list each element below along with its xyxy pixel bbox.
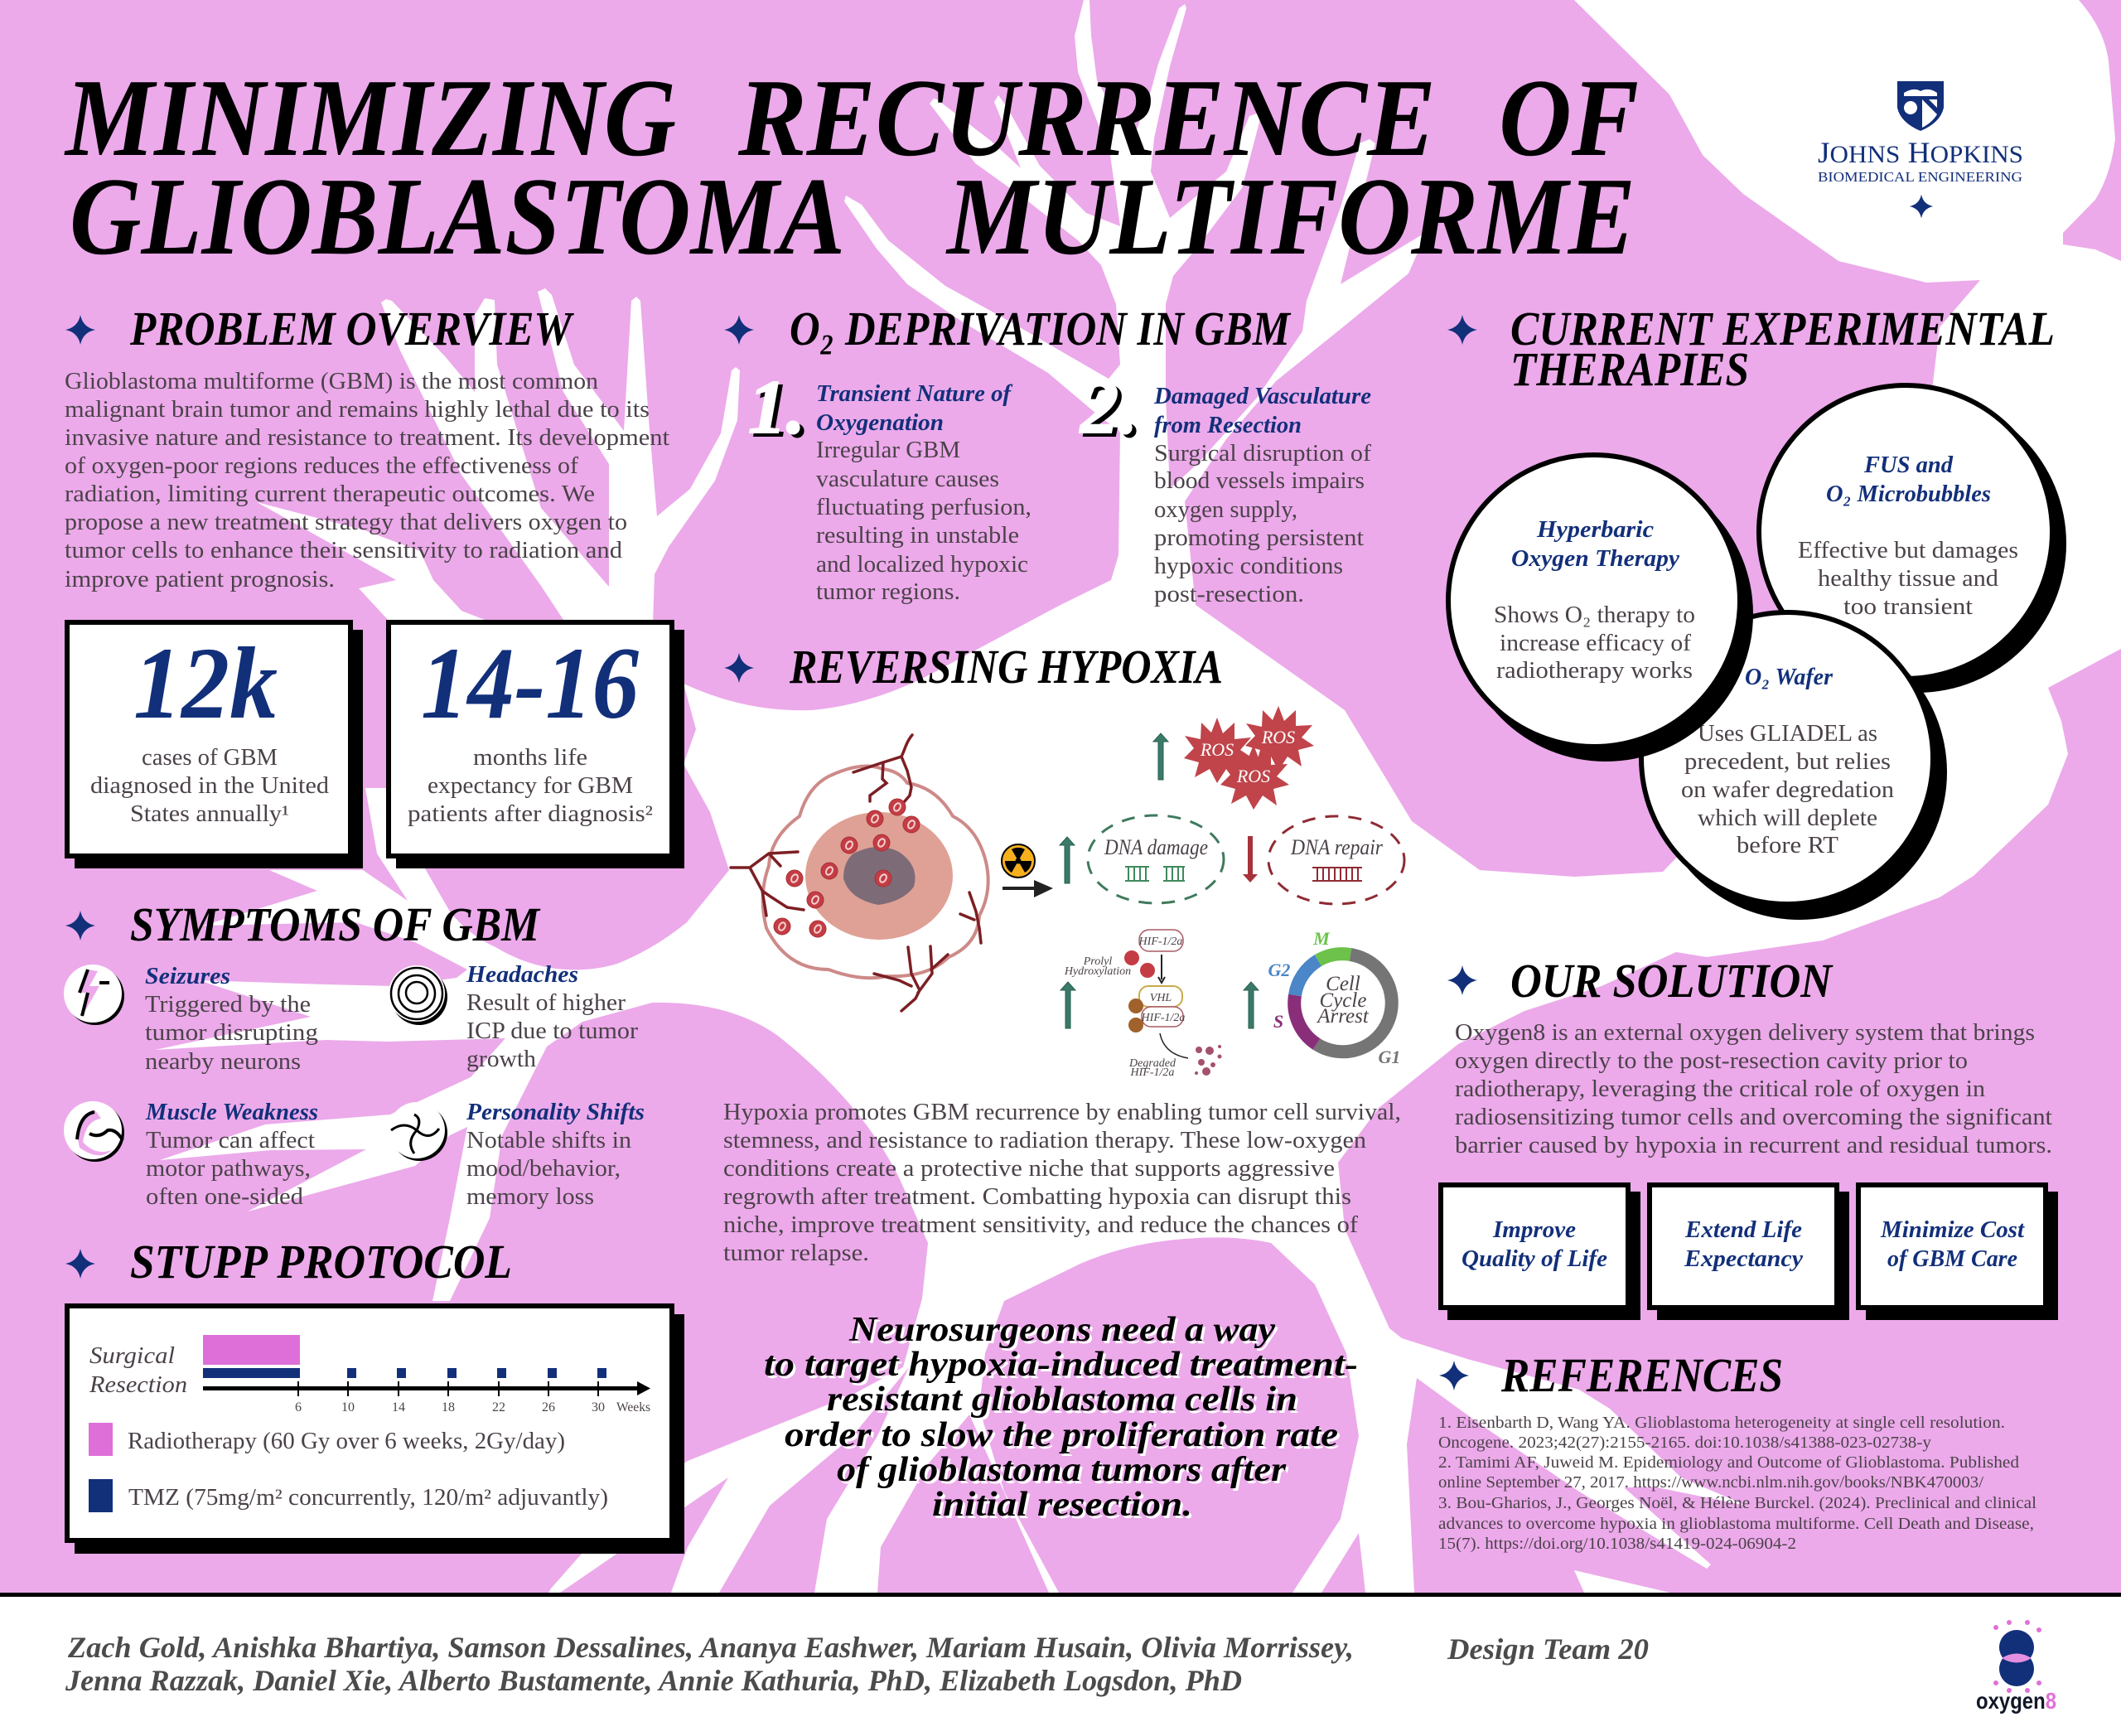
legend: radiotherapy: [89, 1423, 565, 1456]
numeral 1: 1.: [748, 365, 805, 449]
arrow: radiation to effects: [1003, 880, 1053, 897]
text block: solution: radiosensitizing tumor cells and overcoming the significant: [1455, 1105, 2052, 1130]
text block: references: 15(7). https://doi.org/10.1038/s41419-024-06904-2: [1438, 1535, 1796, 1553]
stat box: 12k: cases of GBM: [142, 745, 278, 771]
circle: O2 wafer: precedent, but relies: [1684, 749, 1891, 775]
stat box: 14-16: months life: [473, 745, 587, 771]
heading: symptoms: SYMPTOMS OF GBM: [130, 897, 541, 951]
circle: O2 wafer: [1641, 612, 1947, 920]
stat box: 12k: [67, 622, 363, 868]
text block: overview: of oxygen-poor regions reduces the effectiveness of: [65, 453, 579, 479]
symptom: personality shifts: memory loss: [466, 1184, 594, 1210]
chart: cell cycle ring: Cell: [1326, 973, 1360, 995]
icon: seizures: [64, 965, 124, 1025]
text: transient nature: tumor regions.: [816, 579, 960, 605]
panel: current experimental therapies: [1447, 302, 2066, 920]
text block: overview: improve patient prognosis.: [65, 567, 335, 592]
arrow: DNA repair down: [1243, 836, 1258, 883]
icon: muscle weakness: [64, 1101, 124, 1162]
chart: cell cycle ring: G1: [1379, 1047, 1400, 1067]
authors: Zach Gold, Anishka Bhartiya, Samson Dessalines, Ananya Eashwer, Mariam Husain, Olivia Morrissey,: [67, 1631, 1354, 1664]
text block: overview: invasive nature and resistance to treatment. Its development: [65, 425, 669, 451]
title: GLIOBLASTOMA: [70, 155, 845, 278]
legend: TMZ: TMZ (75mg/m² concurrently, 120/m² adjuvantly): [128, 1485, 608, 1511]
callout: Neurosurgeons need a way: [851, 1313, 1278, 1352]
circle: hyperbaric oxygen therapy: Shows O₂ therapy to: [1494, 602, 1695, 628]
symptom: seizures: Triggered by the: [145, 992, 311, 1018]
chart: cell cycle ring: S: [1273, 1011, 1283, 1032]
stat box: 12k: 12k: [133, 626, 278, 740]
panel: our solution: [1441, 954, 2058, 1320]
panel: stupp protocol: [65, 1235, 684, 1554]
circle: hyperbaric oxygen therapy: Oxygen Therapy: [1511, 546, 1680, 572]
authors: Jenna Razzak, Daniel Xie, Alberto Bustamente, Annie Kathuria, PhD, Elizabeth Logsdon, PhD: [65, 1664, 1242, 1697]
symptom: muscle weakness: Muscle Weakness: [145, 1100, 318, 1125]
text: transient nature: fluctuating perfusion,: [816, 495, 1032, 520]
icon: star: [1439, 1361, 1469, 1390]
arrow: ROS up: [1153, 733, 1168, 780]
footer band: [0, 1593, 2121, 1736]
chart: treatment timeline: [203, 1335, 650, 1414]
panel: problem overview: [65, 302, 684, 868]
numeral 1: 1.: [752, 368, 809, 452]
goal box: life expectancy: Extend Life: [1684, 1217, 1802, 1243]
text block: solution: radiotherapy, leveraging the critical role of oxygen in: [1455, 1076, 1985, 1102]
authors: [65, 1631, 1354, 1697]
text block: hypoxia: conditions create a protective niche that supports aggressive: [723, 1156, 1335, 1182]
chart: cell cycle ring: Arrest: [1316, 1005, 1370, 1028]
goal box: cost: of GBM Care: [1887, 1246, 2017, 1272]
stat box: 14-16: 14-16: [421, 626, 639, 740]
diagram: HIF pathway: HIF-1/2a: [1130, 1066, 1174, 1079]
diagram: HIF pathway: VHL: [1150, 992, 1172, 1004]
diagram: HIF pathway: HIF-1/2a: [1138, 936, 1182, 948]
text: transient nature: Oxygenation: [816, 410, 944, 436]
text: damaged vasculature: Surgical disruption of: [1154, 441, 1372, 467]
text: transient nature: Transient Nature of: [816, 381, 1013, 407]
text block: solution: barrier caused by hypoxia in recurrent and residual tumors.: [1455, 1133, 2052, 1158]
panel: reversing hypoxia: [723, 640, 1404, 1526]
symptom: headaches: [466, 962, 639, 1072]
symptom: seizures: tumor disrupting: [145, 1020, 318, 1046]
chart box: [67, 1306, 684, 1554]
goal box: cost: [1858, 1185, 2058, 1320]
panel: references: [1438, 1348, 2036, 1553]
symptom: muscle weakness: Tumor can affect: [146, 1128, 315, 1153]
icon: star: [1447, 965, 1477, 995]
callout: [764, 1311, 1360, 1526]
diagram: tumor with vessels: [731, 735, 988, 1011]
text block: references: [1438, 1414, 2036, 1553]
callout: initial resection.: [935, 1488, 1195, 1526]
icon: radiation: [1002, 844, 1035, 878]
text block: overview: tumor cells to enhance their sensitivity to radiation and: [65, 538, 622, 563]
title: MINIMIZING: [64, 56, 676, 179]
goal box: cost: Minimize Cost: [1880, 1217, 2025, 1243]
text block: overview: malignant brain tumor and remains highly lethal due to its: [65, 397, 650, 423]
callout: order to slow the proliferation rate: [785, 1416, 1338, 1454]
symptom: headaches: Headaches: [466, 962, 578, 988]
callout: resistant glioblastoma cells in: [829, 1383, 1300, 1421]
chart: treatment timeline: 22: [492, 1400, 505, 1414]
heading: problem overview: PROBLEM OVERVIEW: [129, 302, 574, 355]
text: damaged vasculature: from Resection: [1154, 413, 1302, 438]
text: damaged vasculature: post-resection.: [1154, 582, 1304, 607]
symptom: headaches: Result of higher: [466, 990, 626, 1016]
text: transient nature: Irregular GBM: [816, 438, 960, 463]
stat box: 14-16: [389, 622, 684, 868]
icon: shield: [1897, 81, 1944, 131]
symptom: personality shifts: Personality Shifts: [466, 1100, 645, 1125]
title: MULTIFORME: [945, 155, 1635, 278]
chart: treatment timeline: 30: [592, 1400, 605, 1414]
circle: hyperbaric oxygen therapy: [1448, 455, 1753, 762]
text block: overview: Glioblastoma multiforme (GBM) is the most common: [65, 369, 598, 394]
legend: radiotherapy: Radiotherapy (60 Gy over 6 weeks, 2Gy/day): [128, 1429, 565, 1454]
icon: ROS stars: ROS: [1261, 727, 1295, 747]
text: damaged vasculature: Damaged Vasculature: [1153, 384, 1371, 409]
circle: FUS and microbubbles: FUS and: [1863, 452, 1954, 478]
numeral 2: 2.: [1079, 365, 1138, 449]
text: damaged vasculature: promoting persistent: [1154, 525, 1364, 551]
callout: of glioblastoma tumors after: [837, 1451, 1287, 1489]
circle: FUS and microbubbles: O₂ Microbubbles: [1826, 481, 1991, 507]
heading: references: REFERENCES: [1500, 1348, 1783, 1402]
text block: overview: radiation, limiting current therapeutic outcomes. We: [65, 481, 595, 507]
goal box: quality of life: [1441, 1185, 1640, 1320]
stat box: 14-16: expectancy for GBM: [428, 773, 633, 799]
label: surgical resection: Surgical: [89, 1343, 175, 1369]
text block: hypoxia: tumor relapse.: [723, 1240, 869, 1266]
circle: FUS and microbubbles: healthy tissue and: [1818, 566, 1998, 592]
diagram: DNA damage: [1088, 815, 1224, 903]
callout: of glioblastoma tumors after: [839, 1453, 1289, 1492]
arrow: cell cycle up: [1244, 982, 1259, 1028]
diagram: HIF pathway: Degraded: [1128, 1057, 1176, 1070]
goal box: quality of life: Improve: [1492, 1217, 1576, 1243]
title: OF: [1499, 56, 1639, 179]
circle: O2 wafer: which will deplete: [1698, 805, 1877, 831]
text block: overview: [65, 369, 669, 592]
panel: symptoms: [64, 897, 645, 1210]
chart: treatment timeline: 18: [442, 1400, 455, 1414]
title: RECURRENCE: [737, 56, 1436, 179]
symptom: headaches: ICP due to tumor: [466, 1018, 639, 1044]
diagram: HIF pathway: Prolyl: [1083, 955, 1112, 968]
callout: to target hypoxia-induced treatment-: [764, 1346, 1358, 1384]
callout: to target hypoxia-induced treatment-: [766, 1348, 1360, 1386]
callout: resistant glioblastoma cells in: [827, 1381, 1297, 1419]
diagram: HIF pathway: HIF-1/2a: [1141, 1012, 1185, 1024]
background: pink lobes: [439, 1003, 1365, 1593]
text block: solution: Oxygen8 is an external oxygen delivery system that brings: [1455, 1020, 2035, 1046]
goal box: quality of life: Quality of Life: [1462, 1246, 1607, 1272]
text: damaged vasculature: [1153, 384, 1372, 607]
heading: current experimental therapies: [1510, 302, 2055, 396]
circle: hyperbaric oxygen therapy: radiotherapy works: [1496, 658, 1693, 684]
icon: ROS stars: [1184, 706, 1314, 810]
symptom: headaches: growth: [466, 1047, 536, 1072]
icon: ROS stars: ROS: [1200, 739, 1234, 760]
text block: references: online September 27, 2017. https://www.ncbi.nlm.nih.gov/books/NBK470003/: [1438, 1473, 1983, 1492]
icon: star: [65, 315, 95, 345]
text block: hypoxia: niche, improve treatment sensitivity, and reduce the chances of: [723, 1212, 1359, 1238]
callout: initial resection.: [932, 1486, 1192, 1524]
symptom: seizures: nearby neurons: [145, 1049, 301, 1075]
text: transient nature: vasculature causes: [816, 467, 999, 492]
chart: cell cycle ring: Cycle: [1320, 989, 1366, 1012]
heading: stupp protocol: STUPP PROTOCOL: [130, 1235, 512, 1289]
chart: cell cycle ring: M: [1312, 928, 1331, 949]
symptom: personality shifts: [466, 1100, 645, 1210]
logo: Johns Hopkins Biomedical Engineering: [1818, 81, 2023, 218]
text: transient nature: [816, 381, 1032, 605]
chart: cell cycle ring: [1268, 928, 1400, 1067]
heading: current experimental therapies: THERAPIES: [1510, 342, 1749, 396]
logo: oxygen8: [1976, 1620, 2056, 1714]
icon: personality shifts: [389, 1102, 447, 1161]
heading: reversing hypoxia: REVERSING HYPOXIA: [789, 640, 1223, 694]
circle: O2 wafer: O₂ Wafer: [1745, 665, 1834, 690]
chart: treatment timeline: 10: [341, 1400, 355, 1414]
chart: treatment timeline: 26: [542, 1400, 555, 1414]
symptom: seizures: [145, 964, 318, 1075]
legend: TMZ: [89, 1479, 608, 1512]
diagram: DNA repair: [1268, 816, 1404, 904]
circle: FUS and microbubbles: Effective but damages: [1798, 538, 2018, 563]
text block: references: 2. Tamimi AF, Juweid M. Epidemiology and Outcome of Glioblastoma. Published: [1438, 1453, 2019, 1472]
chart: cell cycle ring: G2: [1268, 960, 1290, 980]
chart: treatment timeline: Weeks: [616, 1400, 650, 1414]
text: transient nature: and localized hypoxic: [816, 552, 1028, 578]
icon: star: [65, 911, 95, 941]
symptom: muscle weakness: motor pathways,: [146, 1156, 311, 1182]
panel: O2 deprivation: [724, 302, 1372, 607]
icon: star: [65, 1249, 95, 1279]
icon: star: [1447, 315, 1477, 345]
callout: order to slow the proliferation rate: [787, 1419, 1341, 1457]
logo: Johns Hopkins Biomedical Engineering: BIOMEDICAL ENGINEERING: [1818, 169, 2022, 185]
chart: treatment timeline: 14: [392, 1400, 405, 1414]
symptom: personality shifts: mood/behavior,: [466, 1156, 621, 1182]
circle: O2 wafer: on wafer degredation: [1681, 777, 1894, 803]
text block: references: advances to overcome hypoxia in glioblastoma multiforme. Cell Death and Disease,: [1438, 1515, 2034, 1533]
chart: treatment timeline: 6: [295, 1400, 302, 1414]
numeral 2: 2.: [1083, 368, 1142, 452]
stat box: 12k: diagnosed in the United: [90, 773, 329, 799]
circle: hyperbaric oxygen therapy: increase efficacy of: [1500, 631, 1692, 656]
symptom: seizures: Seizures: [145, 964, 230, 989]
stat box: 14-16: patients after diagnosis²: [408, 801, 653, 827]
text block: references: 3. Bou-Gharios, J., Georges Noël, & Hélène Burckel. (2024). Preclinical and clinical: [1438, 1494, 2036, 1512]
diagram: DNA damage: DNA damage: [1104, 835, 1208, 859]
diagram: DNA repair: DNA repair: [1290, 835, 1384, 859]
circle: FUS and microbubbles: too transient: [1843, 594, 1973, 620]
text block: references: 1. Eisenbarth D, Wang YA. Glioblastoma heterogeneity at single cell resolution.: [1438, 1414, 2005, 1432]
circle: FUS and microbubbles: [1759, 385, 2066, 693]
text block: hypoxia: Hypoxia promotes GBM recurrence by enabling tumor cell survival,: [723, 1100, 1401, 1125]
icon: star: [724, 653, 754, 683]
text block: hypoxia: [723, 1100, 1401, 1266]
logo: Johns Hopkins Biomedical Engineering: JOHNS HOPKINS: [1818, 136, 2023, 169]
arrow: HIF up: [1060, 982, 1075, 1028]
goal box: life expectancy: Expectancy: [1684, 1246, 1804, 1272]
circle: hyperbaric oxygen therapy: Hyperbaric: [1536, 517, 1655, 543]
design team label: Design Team 20: [1447, 1632, 1649, 1666]
symptom: muscle weakness: often one-sided: [146, 1184, 303, 1210]
goal box: life expectancy: [1650, 1185, 1849, 1320]
text block: solution: [1455, 1020, 2052, 1158]
text: damaged vasculature: hypoxic conditions: [1154, 554, 1343, 579]
stat box: 12k: States annually¹: [130, 801, 289, 827]
text block: hypoxia: regrowth after treatment. Combatting hypoxia can disrupt this: [723, 1184, 1351, 1210]
icon: headaches: [389, 965, 447, 1025]
title: [64, 56, 1639, 278]
arrow: DNA damage up: [1060, 837, 1075, 883]
text block: hypoxia: stemness, and resistance to radiation therapy. These low-oxygen: [723, 1128, 1366, 1153]
text block: overview: propose a new treatment strategy that delivers oxygen to: [65, 510, 627, 535]
callout: Neurosurgeons need a way: [848, 1311, 1275, 1349]
logo: oxygen8: oxygen8: [1976, 1688, 2056, 1714]
heading: O2 deprivation: O₂ DEPRIVATION IN GBM: [790, 302, 1292, 355]
text block: references: Oncogene. 2023;42(27):2155-2165. doi:10.1038/s41388-023-02738-y: [1438, 1434, 1931, 1452]
text: transient nature: resulting in unstable: [816, 523, 1019, 549]
icon: ROS stars: ROS: [1236, 766, 1270, 786]
diagram: HIF pathway: [1064, 930, 1221, 1079]
text: damaged vasculature: blood vessels impairs: [1154, 468, 1365, 494]
circle: O2 wafer: Uses GLIADEL as: [1698, 721, 1877, 747]
circle: O2 wafer: before RT: [1737, 833, 1838, 858]
heading: our solution: OUR SOLUTION: [1510, 954, 1834, 1008]
symptom: personality shifts: Notable shifts in: [466, 1128, 631, 1153]
text block: solution: oxygen directly to the post-resection cavity prior to: [1455, 1048, 1968, 1074]
icon: star: [724, 315, 754, 345]
symptom: muscle weakness: [145, 1100, 318, 1210]
diagram: HIF pathway: Hydroxylation: [1064, 965, 1131, 978]
label: surgical resection: Resection: [89, 1372, 187, 1398]
label: surgical resection: [89, 1343, 187, 1398]
heading: current experimental therapies: CURRENT EXPERIMENTAL: [1510, 302, 2055, 355]
text: damaged vasculature: oxygen supply,: [1154, 497, 1297, 523]
